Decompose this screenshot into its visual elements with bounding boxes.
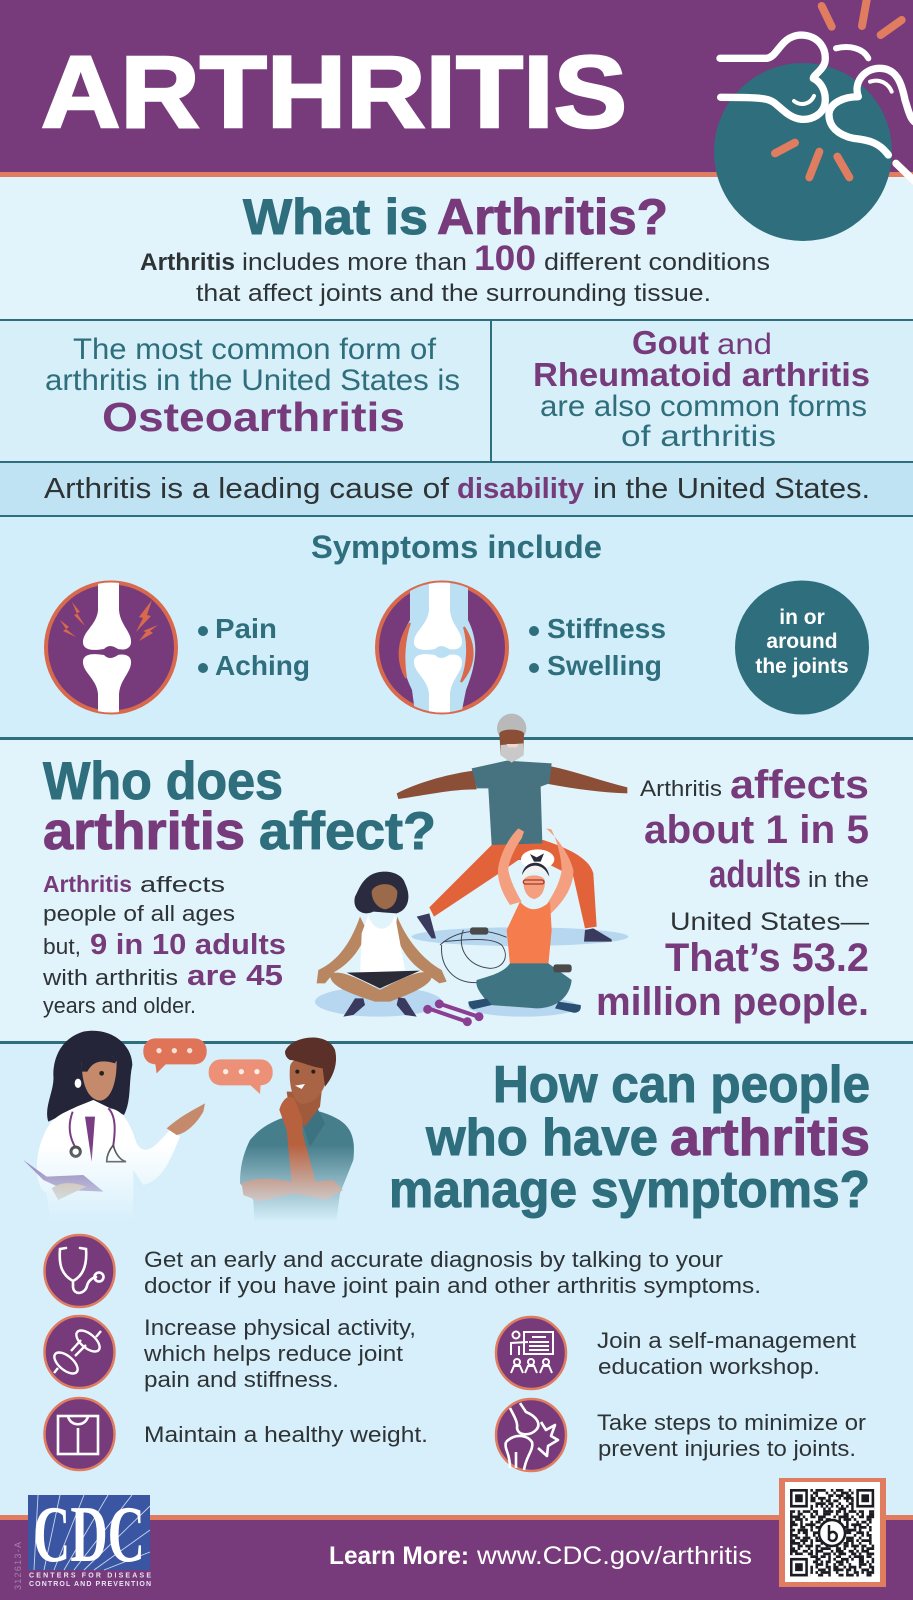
panel: osteoarthritis bbox=[45, 333, 460, 440]
callout: in or around the joints: around bbox=[766, 630, 838, 653]
QR code bbox=[779, 1478, 886, 1587]
callout: in or around the joints: in or bbox=[779, 606, 825, 629]
heading: what is arthritis: What is bbox=[243, 189, 428, 245]
text: ages affected: years and older. bbox=[43, 993, 196, 1018]
text: workshop: education workshop. bbox=[598, 1354, 820, 1379]
text: definition: Arthritis bbox=[140, 249, 235, 276]
heading: how can people manage symptoms: manage symptoms? bbox=[389, 1161, 870, 1219]
text: ages affected: but, bbox=[43, 934, 81, 959]
heading: how can people manage symptoms: How can people bbox=[493, 1056, 870, 1114]
heading: what is arthritis bbox=[243, 189, 668, 245]
text: leading cause of disability: in the United States. bbox=[593, 473, 870, 505]
text: definition: 100 bbox=[474, 239, 536, 278]
CDC logo: CENTERS FOR DISEASE bbox=[29, 1572, 151, 1580]
text: prevent injuries: Take steps to minimize or bbox=[597, 1410, 866, 1435]
text: ages affected: Arthritis bbox=[43, 871, 132, 897]
chat bubble: doctor bbox=[143, 1038, 207, 1073]
text: leading cause of disability: Arthritis is a leading cause of bbox=[44, 473, 450, 505]
icon: stethoscope bbox=[44, 1235, 114, 1307]
heading: who does arthritis affect: Who does bbox=[43, 752, 283, 811]
panel: gout and rheumatoid arthritis bbox=[533, 324, 870, 453]
text: physical activity bbox=[143, 1315, 416, 1392]
callout: in or around the joints bbox=[735, 580, 869, 714]
text: 1 in 5 adults: about 1 in 5 bbox=[644, 808, 869, 852]
illustration: people exercising bbox=[315, 714, 628, 1026]
heading: symptoms include: Symptoms include bbox=[311, 529, 602, 565]
CDC logo: CDC bbox=[33, 1491, 145, 1579]
text: prevent injuries bbox=[597, 1410, 866, 1461]
icon: swollen knee bbox=[375, 580, 509, 714]
heading: who does arthritis affect: arthritis bbox=[43, 802, 245, 861]
text: definition: that affect joints and the surrounding tissue. bbox=[196, 280, 711, 307]
text: 1 in 5 adults bbox=[596, 763, 869, 1024]
heading: how can people manage symptoms: arthritis bbox=[670, 1109, 870, 1167]
text: stiffness and swelling bbox=[529, 613, 666, 681]
man bbox=[240, 1112, 354, 1230]
text: stiffness and swelling: Swelling bbox=[547, 650, 662, 681]
text: definition: includes more than bbox=[242, 249, 467, 276]
text: leading cause of disability: disability bbox=[457, 473, 584, 505]
panel: gout and rheumatoid arthritis: Rheumatoid arthritis bbox=[533, 356, 870, 393]
CDC logo: CONTROL AND PREVENTION bbox=[29, 1581, 151, 1588]
learn more link: www.CDC.gov/arthritis bbox=[476, 1542, 752, 1570]
text: healthy weight: Maintain a healthy weight. bbox=[144, 1422, 428, 1447]
text: 1 in 5 adults: adults bbox=[709, 854, 801, 896]
text: 1 in 5 adults: in the bbox=[808, 867, 869, 892]
learn more link bbox=[329, 1542, 752, 1570]
text: pain and aching: Aching bbox=[215, 650, 310, 681]
text: diagnosis: Get an early and accurate diagnosis by talking to your bbox=[144, 1247, 723, 1272]
callout: in or around the joints: the joints bbox=[755, 655, 849, 678]
panel: gout and rheumatoid arthritis: and bbox=[717, 328, 772, 361]
text: definition: different conditions bbox=[544, 249, 770, 276]
icon: painful knee bbox=[44, 580, 178, 714]
icon: joint injury bbox=[496, 1399, 566, 1471]
text: workshop bbox=[597, 1328, 856, 1379]
heading: who does arthritis affect: affect? bbox=[259, 802, 436, 861]
text: pain and aching: Pain bbox=[215, 613, 277, 644]
text: ages affected: affects bbox=[140, 872, 225, 897]
learn more link: Learn More: bbox=[329, 1542, 469, 1570]
text: ages affected: with arthritis bbox=[42, 965, 178, 990]
heading: who does arthritis affect bbox=[43, 752, 436, 861]
text: ages affected: 9 in 10 adults bbox=[90, 929, 286, 961]
text: 1 in 5 adults: That’s 53.2 bbox=[665, 936, 869, 980]
illustration: doctor and patient bbox=[23, 1031, 354, 1230]
text: ages affected bbox=[42, 871, 286, 1018]
panel: gout and rheumatoid arthritis: Gout bbox=[632, 324, 709, 361]
icon: dumbbell bbox=[44, 1316, 114, 1388]
panel: osteoarthritis: The most common form of bbox=[73, 333, 437, 366]
icon: workshop bbox=[496, 1317, 566, 1389]
text: physical activity: pain and stiffness. bbox=[144, 1367, 339, 1392]
header banner bbox=[0, 0, 913, 177]
heading: how can people manage symptoms: who have bbox=[425, 1109, 658, 1167]
text: workshop: Join a self-management bbox=[597, 1328, 856, 1353]
text: pain and aching bbox=[198, 613, 310, 681]
text: definition bbox=[140, 239, 770, 307]
title: ARTHRITIS bbox=[41, 35, 627, 149]
publication number: 312613-A bbox=[13, 1542, 23, 1590]
CDC logo bbox=[28, 1491, 151, 1588]
icon: scale bbox=[44, 1398, 114, 1470]
text: diagnosis bbox=[144, 1247, 761, 1298]
footer band bbox=[0, 1515, 913, 1600]
panel: gout and rheumatoid arthritis: of arthritis bbox=[621, 420, 776, 453]
heading: what is arthritis: Arthritis? bbox=[437, 189, 668, 245]
text: stiffness and swelling: Stiffness bbox=[547, 613, 666, 644]
text: diagnosis: doctor if you have joint pain and other arthritis symptoms. bbox=[144, 1273, 761, 1298]
text: leading cause of disability bbox=[44, 473, 870, 505]
heading: how can people manage symptoms bbox=[389, 1056, 870, 1219]
text: 1 in 5 adults: million people. bbox=[596, 980, 869, 1024]
text: physical activity: Increase physical activity, bbox=[144, 1315, 416, 1340]
text: ages affected: people of all ages bbox=[43, 901, 235, 926]
text: 1 in 5 adults: Arthritis bbox=[640, 776, 722, 801]
text: 1 in 5 adults: United States— bbox=[670, 908, 869, 936]
fade of figures bbox=[25, 1145, 370, 1235]
panel: gout and rheumatoid arthritis: are also common forms bbox=[540, 390, 867, 423]
text: ages affected: are 45 bbox=[187, 960, 283, 992]
panel: osteoarthritis: arthritis in the United States is bbox=[45, 364, 460, 397]
text: prevent injuries: prevent injuries to joints. bbox=[598, 1436, 856, 1461]
text: 1 in 5 adults: affects bbox=[730, 763, 869, 807]
icon: painful joints on teal circle bbox=[714, 0, 913, 241]
text: physical activity: which helps reduce joint bbox=[143, 1341, 403, 1366]
panel: osteoarthritis: Osteoarthritis bbox=[102, 394, 405, 440]
